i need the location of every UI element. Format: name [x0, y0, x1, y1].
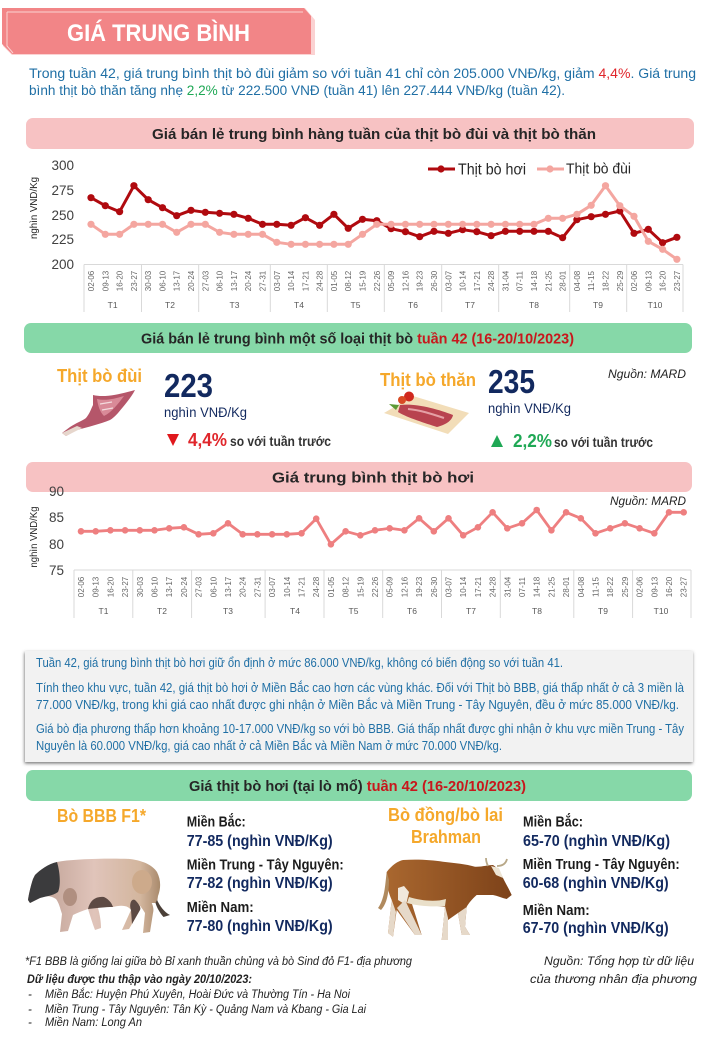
line chart: live cattle price: 13-17 — [224, 576, 233, 597]
line chart: live cattle price: T6 — [407, 606, 417, 616]
line chart: retail beef prices: 17-21 — [301, 270, 310, 291]
line chart: live cattle price: 24-28 — [312, 576, 321, 597]
source note — [530, 954, 697, 986]
footnotes: - — [28, 989, 32, 1001]
line chart: retail beef prices: 275 — [51, 183, 74, 198]
panel: thịt bò thăn: nghìn VNĐ/Kg — [488, 400, 571, 416]
line chart: live cattle price: 03-07 — [444, 576, 454, 597]
footnotes: - — [28, 1017, 32, 1029]
line chart: retail beef prices: 07-11 — [516, 271, 525, 291]
line chart: retail beef prices: T6 — [408, 300, 418, 310]
line chart: retail beef prices: nghìn VND/Kg — [28, 177, 40, 239]
footnotes: Miền Nam: Long An — [45, 1017, 142, 1029]
line chart: retail beef prices: 06-10 — [158, 270, 168, 291]
line chart: retail beef prices: 03-07 — [273, 270, 282, 291]
heading: slaughterhouse prices: Giá thịt bò hơi (tại lò mổ) tuần 42 (16-20/10/2023) — [189, 779, 526, 795]
line chart: retail beef prices: 13-17 — [230, 270, 239, 291]
line chart: live cattle price: 11-15 — [592, 577, 600, 597]
line chart: live cattle price: T2 — [157, 606, 167, 616]
line chart: live cattle price: 20-24 — [180, 576, 189, 597]
line chart: retail beef prices: 16-20 — [116, 270, 125, 291]
line chart: retail beef prices: 20-24 — [187, 270, 196, 291]
line chart: retail beef prices: 15-19 — [358, 270, 368, 291]
line chart: live cattle price: 12-16 — [400, 576, 409, 597]
icon: cow — [378, 858, 512, 940]
panel: thịt bò đùi: Thịt bò đùi — [57, 366, 142, 386]
line chart: retail beef prices: T2 — [165, 300, 175, 310]
line chart: live cattle price: 10-14 — [459, 576, 468, 597]
line chart: retail beef prices: T3 — [230, 300, 240, 310]
line chart: retail beef prices: 20-24 — [244, 270, 253, 291]
line chart: live cattle price: T5 — [349, 606, 359, 616]
line chart: live cattle price: 09-13 — [650, 576, 659, 597]
line chart: live cattle price: 16-20 — [106, 576, 115, 597]
line chart: retail beef prices: 21-25 — [544, 270, 553, 291]
footnotes: Miền Bắc: Huyện Phú Xuyên, Hoài Đức và Thường Tín - Ha Noi — [45, 988, 350, 1001]
panel: thịt bò đùi: nghìn VNĐ/Kg — [164, 404, 247, 420]
line chart: retail beef prices: 22-26 — [373, 270, 382, 291]
line chart: live cattle price: 75 — [49, 563, 64, 578]
panel: local / Brahman cattle: Miền Bắc: — [523, 812, 583, 830]
legend: Thịt bò hơi — [458, 162, 526, 178]
title banner — [2, 8, 315, 55]
line chart: live cattle price: 04-08 — [577, 576, 586, 597]
line chart: retail beef prices: 02-06 — [87, 270, 96, 291]
line chart: retail beef prices: 03-07 — [444, 270, 453, 291]
panel: thịt bò đùi: 4,4% — [188, 430, 227, 450]
panel: BBB F1 cattle: 77-82 (nghìn VNĐ/Kg) — [187, 875, 333, 892]
line chart: live cattle price: 30-03 — [136, 576, 145, 597]
heading: live cattle average: Giá trung bình thịt bò hơi — [272, 470, 474, 486]
panel: thịt bò đùi — [57, 366, 331, 450]
line chart: live cattle price: 17-21 — [474, 576, 483, 597]
line chart: retail beef prices: 01-05 — [330, 270, 339, 291]
line chart: live cattle price: 85 — [49, 510, 64, 525]
line chart: retail beef prices — [28, 158, 683, 312]
panel: thịt bò thăn: 235 — [488, 363, 535, 400]
series: thịt bò hơi — [91, 186, 677, 243]
heading: retail prices by cut: Giá bán lẻ trung bình một số loại thịt bò tuần 42 (16-20/10/2023) — [141, 332, 574, 348]
panel: commentary: Nguyên là 60.000 VNĐ/kg, giá cao nhất ở cả Miền Bắc và Miền Nam ở mức 70.000 VNĐ/kg. — [36, 738, 502, 753]
line chart: retail beef prices: 24-28 — [316, 270, 325, 291]
panel: thịt bò đùi: 223 — [164, 367, 213, 404]
line chart: retail beef prices: 23-27 — [673, 270, 682, 291]
panel: local / Brahman cattle — [378, 805, 680, 940]
panel: BBB F1 cattle: Bò BBB F1* — [57, 806, 146, 826]
line chart: retail beef prices: 26-30 — [430, 270, 439, 291]
line chart: retail beef prices: 10-14 — [459, 270, 468, 291]
icon: beef leg — [62, 390, 135, 436]
line chart: retail beef prices: 18-22 — [602, 270, 610, 291]
line chart: retail beef prices: 04-08 — [573, 270, 582, 291]
line chart: live cattle price: 27-03 — [195, 576, 204, 597]
line chart: live cattle price: 19-23 — [415, 576, 424, 597]
line chart: retail beef prices: 11-15 — [587, 271, 596, 291]
line chart: live cattle price: 23-27 — [121, 576, 130, 597]
heading: slaughterhouse prices — [26, 770, 692, 801]
line chart: retail beef prices: T7 — [465, 300, 475, 310]
line chart: live cattle price: 31-04 — [503, 576, 512, 597]
line chart: live cattle price: 01-05 — [327, 576, 336, 597]
line chart: live cattle price: 02-06 — [77, 576, 86, 597]
line chart: retail beef prices: 13-17 — [173, 270, 182, 291]
panel: thịt bò thăn: Nguồn: MARD — [608, 367, 686, 381]
icon: up arrow — [491, 435, 503, 447]
line chart: live cattle price: 10-14 — [283, 576, 292, 597]
panel: local / Brahman cattle: 60-68 (nghìn VNĐ/Kg) — [523, 875, 669, 892]
intro text — [29, 66, 696, 98]
heading: weekly retail price: Giá bán lẻ trung bình hàng tuần của thịt bò đùi và thịt bò thăn — [152, 127, 596, 143]
panel: local / Brahman cattle: Miền Trung - Tây Nguyên: — [523, 857, 680, 873]
icon: down arrow — [167, 434, 179, 446]
line chart: live cattle price: 07-11 — [518, 577, 527, 597]
footnotes: Dữ liệu được thu thập vào ngày 20/10/2023: — [27, 974, 252, 986]
intro text: Trong tuần 42, giá trung bình thịt bò đùi giảm so với tuần 41 chỉ còn 205.000 VNĐ/kg, giảm 4,4%. Giá trung — [29, 66, 696, 81]
panel: thịt bò thăn: 2,2% — [513, 431, 552, 451]
line chart: live cattle price: 25-29 — [621, 576, 630, 597]
panel: thịt bò thăn — [380, 363, 686, 451]
line chart: live cattle price: 02-06 — [636, 576, 645, 597]
line chart: retail beef prices: 06-10 — [216, 270, 225, 291]
panel: local / Brahman cattle: Bò đồng/bò lai — [388, 805, 503, 825]
line chart: live cattle price: 28-01 — [562, 576, 571, 597]
line chart: retail beef prices: 27-31 — [258, 270, 268, 291]
line chart: retail beef prices: 16-20 — [659, 270, 668, 291]
line chart: live cattle price: T7 — [466, 606, 476, 616]
line chart: retail beef prices: T5 — [351, 300, 361, 310]
line chart: retail beef prices: 09-13 — [644, 270, 653, 291]
line chart: retail beef prices: 02-06 — [630, 270, 639, 291]
line chart: live cattle price: Nguồn: MARD — [610, 494, 686, 508]
line chart: live cattle price: 09-13 — [92, 576, 101, 597]
panel: local / Brahman cattle: 65-70 (nghìn VNĐ/Kg) — [523, 833, 670, 850]
panel: local / Brahman cattle: Miền Nam: — [523, 903, 590, 919]
panel: BBB F1 cattle: Miền Nam: — [187, 900, 254, 916]
line chart: retail beef prices: 31-04 — [501, 270, 510, 291]
line chart: live cattle price: T3 — [223, 606, 233, 616]
line chart: live cattle price: 18-22 — [606, 576, 615, 597]
panel: BBB F1 cattle: 77-85 (nghìn VNĐ/Kg) — [187, 833, 333, 850]
line chart: live cattle price: 23-27 — [680, 576, 689, 597]
line chart: live cattle price: 03-07 — [268, 576, 277, 597]
line chart: live cattle price: 24-28 — [489, 576, 498, 597]
line chart: retail beef prices: 225 — [51, 232, 74, 247]
line chart: retail beef prices: 10-14 — [287, 270, 296, 291]
line chart: live cattle price: 05-09 — [386, 576, 395, 597]
line chart: retail beef prices: 09-13 — [101, 270, 110, 291]
line chart: retail beef prices: 05-09 — [387, 270, 396, 291]
line chart: retail beef prices: T1 — [108, 300, 118, 310]
title banner: GIÁ TRUNG BÌNH — [67, 19, 250, 47]
line chart: live cattle price: 08-12 — [342, 576, 351, 597]
source note: Nguồn: Tổng hợp từ dữ liệu — [544, 954, 694, 968]
line chart: live cattle price: 13-17 — [165, 576, 174, 597]
legend — [428, 162, 631, 178]
panel: thịt bò thăn: Thịt bò thăn — [380, 370, 476, 390]
line chart: live cattle price: T1 — [99, 606, 109, 616]
line chart: live cattle price: 26-30 — [430, 576, 439, 597]
footnotes: *F1 BBB là giống lai giữa bò Bỉ xanh thuần chủng và bò Sind đỏ F1- địa phương — [25, 956, 413, 968]
line chart: live cattle price: 80 — [49, 537, 64, 552]
line chart: live cattle price — [28, 484, 691, 618]
line chart: live cattle price: 15-19 — [356, 576, 365, 597]
panel: BBB F1 cattle: 77-80 (nghìn VNĐ/Kg) — [187, 918, 333, 935]
line chart: retail beef prices: 30-03 — [144, 270, 153, 291]
footnotes — [25, 956, 413, 1029]
line chart: retail beef prices: 14-18 — [530, 270, 539, 291]
legend: Thịt bò đùi — [566, 162, 631, 178]
source note: của thương nhân địa phương — [530, 972, 697, 986]
panel: thịt bò đùi: so với tuần trước — [230, 433, 331, 449]
line chart: retail beef prices: 200 — [51, 257, 74, 272]
line chart: live cattle price: T10 — [654, 606, 669, 616]
line chart: retail beef prices: T4 — [294, 300, 304, 310]
line chart: retail beef prices: 25-29 — [616, 270, 625, 291]
series: thịt bò đùi — [91, 186, 677, 259]
line chart: live cattle price: 06-10 — [150, 576, 160, 597]
line chart: retail beef prices: 12-16 — [401, 270, 410, 291]
line chart: live cattle price: 17-21 — [298, 576, 306, 597]
panel: commentary — [25, 651, 693, 762]
line chart: retail beef prices: 300 — [51, 158, 74, 173]
series: live cattle — [81, 510, 684, 544]
line chart: retail beef prices: 250 — [51, 208, 74, 223]
line chart: live cattle price: 14-18 — [533, 576, 542, 597]
line chart: live cattle price: T4 — [290, 606, 300, 616]
intro text: bình thịt bò thăn tăng nhẹ 2,2% từ 222.500 VNĐ (tuần 41) lên 227.444 VNĐ/kg (tuần 42). — [29, 83, 565, 98]
panel: commentary: Tuần 42, giá trung bình thịt bò hơi giữ ổn định ở mức 86.000 VNĐ/kg, không có biến động so với tuần 41. — [36, 655, 563, 670]
footnotes: Miền Trung - Tây Nguyên: Tân Kỳ - Quảng Nam và Kbang - Gia Lai — [45, 1004, 366, 1016]
heading: live cattle average — [26, 462, 692, 492]
panel: BBB F1 cattle — [28, 806, 344, 935]
line chart: live cattle price: 22-26 — [371, 576, 380, 597]
panel: thịt bò thăn: so với tuần trước — [554, 434, 653, 450]
line chart: live cattle price: 16-20 — [665, 576, 674, 597]
line chart: live cattle price: 06-10 — [209, 576, 218, 597]
line chart: live cattle price: 20-24 — [239, 576, 248, 597]
heading: weekly retail price — [26, 118, 694, 149]
icon: steak on board — [384, 392, 469, 434]
line chart: retail beef prices: 17-21 — [473, 270, 482, 291]
line chart: retail beef prices: 19-23 — [416, 270, 425, 291]
line chart: retail beef prices: T9 — [593, 300, 603, 310]
line chart: retail beef prices: 24-28 — [487, 270, 496, 291]
panel: local / Brahman cattle: 67-70 (nghìn VNĐ/Kg) — [523, 920, 669, 937]
panel: BBB F1 cattle: Miền Bắc: — [187, 812, 246, 830]
footnotes: - — [28, 1004, 32, 1016]
panel: local / Brahman cattle: Brahman — [411, 827, 481, 847]
line chart: retail beef prices: 23-27 — [130, 270, 139, 291]
panel: BBB F1 cattle: Miền Trung - Tây Nguyên: — [187, 858, 344, 874]
line chart: retail beef prices: 27-03 — [201, 270, 210, 291]
line chart: retail beef prices: 08-12 — [344, 270, 353, 291]
line chart: live cattle price: T8 — [532, 606, 542, 616]
line chart: live cattle price: 27-31 — [253, 576, 262, 597]
line chart: live cattle price: 90 — [49, 484, 64, 499]
line chart: live cattle price: T9 — [598, 606, 608, 616]
line chart: retail beef prices: T8 — [529, 300, 539, 310]
line chart: retail beef prices: 28-01 — [559, 270, 568, 291]
icon: bull — [28, 859, 170, 933]
line chart: live cattle price: nghìn VND/Kg — [28, 506, 40, 568]
heading: retail prices by cut — [24, 323, 692, 353]
line chart: live cattle price: 21-25 — [547, 576, 556, 597]
line chart: retail beef prices: T10 — [648, 300, 663, 310]
